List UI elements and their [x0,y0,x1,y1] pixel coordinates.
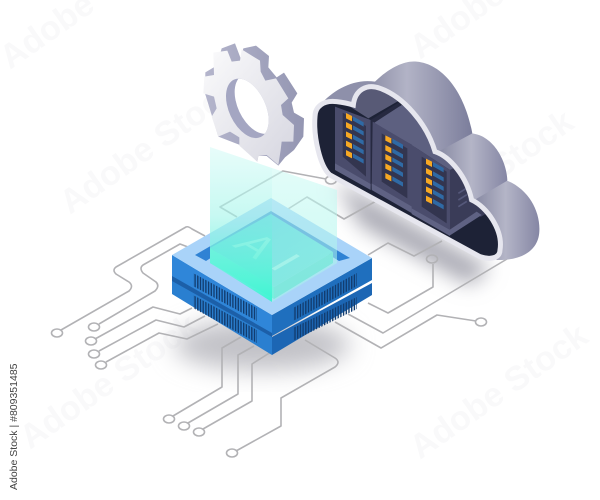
shadow under chip [174,319,350,371]
chip upper layer right [272,258,372,336]
chip recess [195,211,350,261]
server 1 [335,102,400,190]
chip lower layer right [272,283,372,355]
stock credit: Adobe Stock | #809351485 [8,363,20,490]
cloud lobe right middle [435,133,507,202]
AI label: AI [224,227,323,284]
AI block left side [210,248,274,299]
AI block right side [274,252,333,299]
circuit lines [52,171,507,457]
server 3 [412,139,486,236]
cloud lobe top [353,61,472,153]
server 2 [372,105,426,213]
chip gap [172,276,272,337]
back wall [350,89,398,118]
watermark: Adobe Stock [403,316,595,467]
watermark: Adobe Stock [13,306,205,457]
gear hole [226,78,268,138]
floor [457,216,480,231]
chip lower layer left [172,277,272,355]
AI block top [210,214,333,287]
watermark: Stock [483,102,581,187]
chip top [172,198,372,315]
cloud opening interior [317,89,498,256]
watermark: Adobe Stock [53,71,245,222]
cloud lobe left [320,81,380,105]
light column [210,147,337,302]
icon: cloud with servers [310,61,539,267]
cloud lobe right bottom [472,178,539,260]
shadow under cloud [335,180,490,285]
cloud rim [315,87,500,258]
gear back [205,43,304,166]
gear face [203,49,294,165]
icon: gear [203,43,304,166]
AI chip [172,198,372,355]
chip vents [193,273,357,343]
chip upper layer left [172,255,272,334]
